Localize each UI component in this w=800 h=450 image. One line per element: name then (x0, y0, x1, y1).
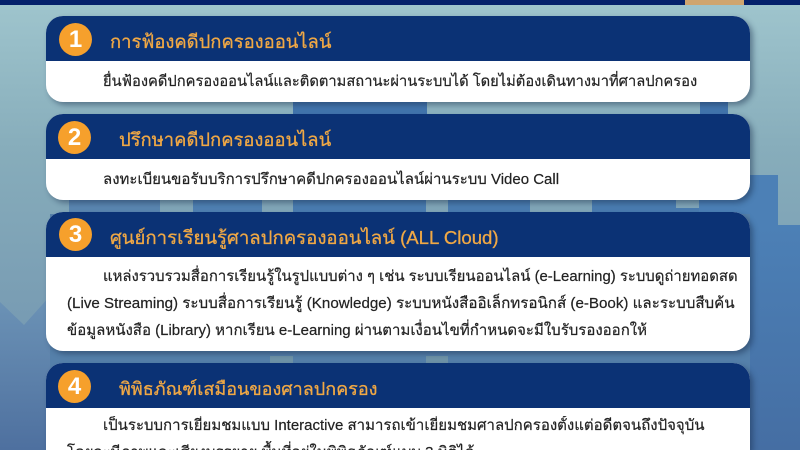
text 1: ยื่นฟ้องคดีปกครองออนไลน์และติดตามสถานะผ่านระบบได้ โดยไม่ต้องเดินทางมาที่ศาลปกครอง (103, 74, 697, 90)
text 3: (Live Streaming) ระบบสื่อการเรียนรู้ (Knowledge) ระบบหนังสืออิเล็กทรอนิกส์ (e-Book) และระบบสืบค้น (67, 295, 735, 312)
text 4 (67, 416, 704, 450)
text 3: แหล่งรวบรวมสื่อการเรียนรู้ในรูปแบบต่าง ๆ เช่น ระบบเรียนออนไลน์ (e-Learning) ระบบดูถ่ายทอดสด (103, 269, 738, 285)
number badge 1 (59, 23, 92, 56)
panel 3: learning centre (46, 212, 750, 351)
number badge 3 (59, 218, 92, 251)
top banner (0, 0, 800, 5)
top banner accent (685, 0, 744, 5)
text 3 (67, 265, 738, 340)
heading 4: พิพิธภัณฑ์เสมือนของศาลปกครอง (119, 379, 377, 399)
number badge 3: 3 (69, 221, 82, 248)
heading 3: ศูนย์การเรียนรู้ศาลปกครองออนไลน์ (ALL Cloud) (110, 227, 499, 248)
number badge 4: 4 (68, 373, 81, 400)
number badge 1: 1 (69, 26, 82, 53)
heading 2: ปรึกษาคดีปกครองออนไลน์ (119, 129, 331, 150)
text 4: เป็นระบบการเยี่ยมชมแบบ Interactive สามารถเข้าเยี่ยมชมศาลปกครองตั้งแต่อดีตจนถึงปัจจุบัน (103, 417, 704, 434)
text 3: ข้อมูลหนังสือ (Library) หากเรียน e-Learning ผ่านตามเงื่อนไขที่กำหนดจะมีใบรับรองออกให้ (67, 322, 647, 339)
number badge 2: 2 (68, 124, 81, 151)
text 2: ลงทะเบียนขอรับบริการปรึกษาคดีปกครองออนไลน์ผ่านระบบ Video Call (103, 171, 559, 188)
number badge 4 (58, 370, 91, 403)
panel 2: online consultation (46, 114, 750, 200)
number badge 2 (58, 121, 91, 154)
heading 1: การฟ้องคดีปกครองออนไลน์ (110, 31, 331, 52)
panel 1: online filing (46, 16, 750, 102)
